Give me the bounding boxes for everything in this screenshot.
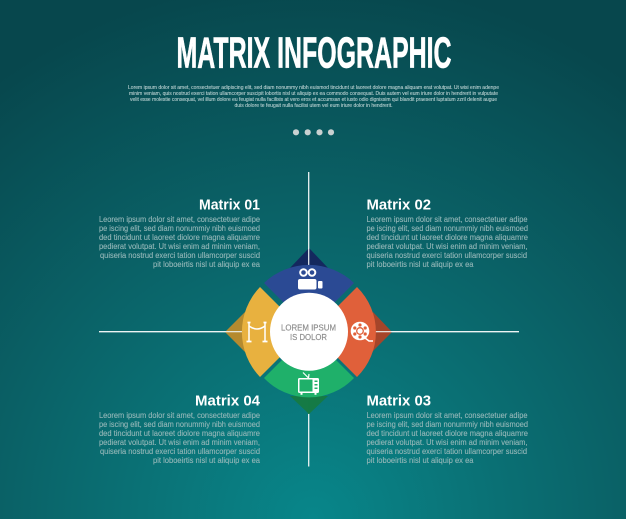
body text: Matrix 04: pedierat volutpat. Ut wisi enim ad minim veniam, — [99, 437, 260, 447]
dark triangle: right — [373, 312, 392, 351]
heading: Matrix 03: Matrix 03 — [366, 394, 431, 410]
body text: Matrix 04: pit loboeirtis nisl ut aliquip ex ea — [153, 455, 260, 465]
segment: blue — [264, 265, 354, 328]
body text: Matrix 04: Leorem ipsum dolor sit amet, consectetuer adipe — [99, 410, 260, 420]
intro paragraph: minim veniam, quis nostrud exerci tation ullamcorper suscipit lobortis nisl ut aliquip ex ea commodo consequat. Duis autem vel eum iriure dolor in hendrerit in vulputate — [129, 91, 498, 97]
dark triangle: top — [289, 248, 329, 269]
body text: Matrix 02: Leorem ipsum dolor sit amet, consectetuer adipe — [366, 214, 528, 224]
segment: orange — [312, 287, 376, 377]
body text: Matrix 02: ded tincidunt ut laoreet diolore magna aliquamre — [366, 232, 528, 242]
panel: Matrix 02 — [366, 198, 528, 269]
panel: Matrix 01 — [99, 198, 260, 269]
body text: Matrix 04: ded tincidunt ut laoreet diolore magna aliquamre — [99, 428, 260, 438]
body text: Matrix 02: pe iscing elit, sed diam nonummiy nibh euismoed — [366, 223, 528, 233]
axis overlay on triangles — [225, 248, 392, 414]
matrix axes — [99, 172, 519, 466]
body text: Matrix 01: pe iscing elit, sed diam nonummiy nibh euismoed — [99, 223, 260, 233]
body text: Matrix 01: ded tincidunt ut laoreet diolore magna aliquamre — [99, 232, 260, 242]
heading: Matrix 04: Matrix 04 — [195, 394, 261, 410]
body text: Matrix 04 — [99, 410, 260, 465]
dark triangle: bottom — [290, 396, 328, 414]
body text: Matrix 02: quiseria nostrud exerci tation ullamcorper suscid — [366, 250, 527, 260]
body text: Matrix 01: pedierat volutpat. Ut wisi enim ad minim veniam, — [99, 241, 260, 251]
body text: Matrix 03: Leorem ipsum dolor sit amet, consectetuer adipe — [366, 410, 528, 420]
pagination dots — [293, 129, 334, 135]
center circle — [270, 293, 348, 371]
panel: Matrix 04 — [99, 394, 261, 465]
segment: yellow — [242, 287, 305, 377]
icon: television — [298, 372, 319, 395]
intro paragraph — [128, 85, 499, 109]
icon: film reel — [351, 322, 373, 341]
body text: Matrix 03: pit loboeirtis nisl ut aliquip ex ea — [366, 455, 474, 465]
body text: Matrix 02 — [366, 214, 528, 269]
body text: Matrix 01: quiseria nostrud exerci tation ullamcorper suscid — [100, 250, 260, 260]
intro paragraph: Lorem ipsum dolor sit amet, consectetuer adipiscing elit, sed diam nonummy nibh euismod tincidunt ut laoreet dolore magna aliquam erat volutpat. Ut wisi enim adenpe — [128, 85, 499, 91]
body text: Matrix 03: quiseria nostrud exerci tation ullamcorper suscid — [366, 446, 527, 456]
heading: Matrix 01: Matrix 01 — [199, 198, 260, 214]
body text: Matrix 02: pit loboeirtis nisl ut aliquip ex ea — [366, 259, 474, 269]
panel: Matrix 03 — [366, 394, 528, 465]
body text: Matrix 03: pedierat volutpat. Ut wisi enim ad minim veniam, — [366, 437, 528, 447]
center circle: IS DOLOR — [290, 333, 327, 342]
body text: Matrix 01: Leorem ipsum dolor sit amet, consectetuer adipe — [99, 214, 260, 224]
body text: Matrix 03: pe iscing elit, sed diam nonummiy nibh euismoed — [366, 419, 528, 429]
intro paragraph: velit esse molestie consequat, vel illum dolore eu feugiat nulla facilisis at vero eros et accumsan et iusto odio dignissim qui blandit praesent luptatum zzril delenit augue — [130, 97, 497, 103]
intro paragraph: duis dolore te feugait nulla facilisi utem vel eum iriure dolor in hendrerit. — [234, 103, 393, 109]
body text: Matrix 03: ded tincidunt ut laoreet diolore magna aliquamre — [366, 428, 528, 438]
heading: Matrix 02: Matrix 02 — [366, 198, 431, 214]
icon: movie camera — [298, 269, 322, 290]
dark triangle: left — [225, 312, 245, 352]
body text: Matrix 02: pedierat volutpat. Ut wisi enim ad minim veniam, — [366, 241, 528, 251]
body text: Matrix 04: quiseria nostrud exerci tation ullamcorper suscid — [100, 446, 260, 456]
body text: Matrix 01 — [99, 214, 260, 269]
body text: Matrix 03 — [366, 410, 528, 465]
icon: rope barrier — [246, 322, 268, 342]
body text: Matrix 01: pit loboeirtis nisl ut aliquip ex ea — [153, 259, 260, 269]
segment: green — [264, 333, 354, 397]
center label: LOREM IPSUM — [281, 324, 336, 332]
body text: Matrix 04: pe iscing elit, sed diam nonummiy nibh euismoed — [99, 419, 260, 429]
